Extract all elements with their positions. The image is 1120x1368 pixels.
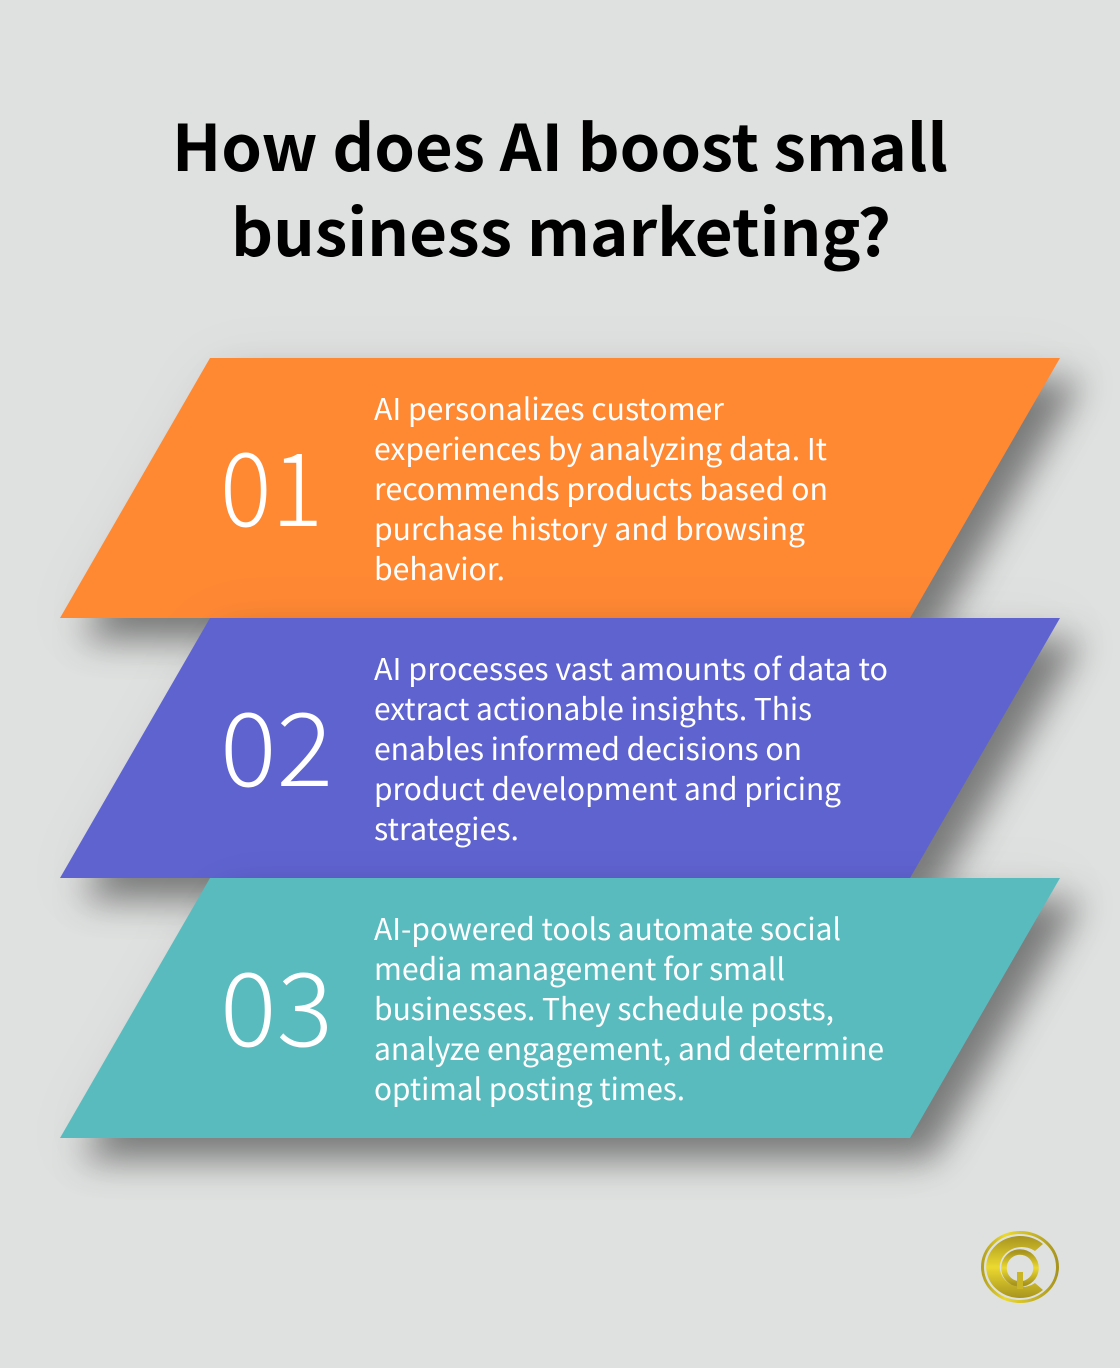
text: step 03: analyze engagement, and determine xyxy=(374,1025,884,1069)
panel: step 03 xyxy=(60,878,1082,1160)
text: step 03: businesses. They schedule posts, xyxy=(374,985,834,1029)
number 01: 01 xyxy=(220,409,323,556)
text: step 01: recommends products based on xyxy=(374,465,828,509)
panel: step 01 xyxy=(60,358,1082,640)
text: step 02 xyxy=(374,645,888,849)
text: step 03: AI-powered tools automate social xyxy=(374,905,841,949)
text: step 01: AI personalizes customer xyxy=(374,385,724,429)
text: step 03: optimal posting times. xyxy=(374,1065,685,1109)
text: step 02: product development and pricing xyxy=(374,765,841,809)
text: step 01 xyxy=(374,385,828,589)
number 02: 02 xyxy=(220,669,333,816)
text: step 01: experiences by analyzing data. It xyxy=(374,425,827,469)
text: step 02: AI processes vast amounts of data to xyxy=(374,645,888,689)
text: step 01: purchase history and browsing xyxy=(374,505,805,549)
number 03: 03 xyxy=(220,929,333,1076)
title: business marketing? xyxy=(231,183,891,275)
text: step 02: extract actionable insights. This xyxy=(374,685,812,729)
text: step 02: enables informed decisions on xyxy=(374,725,802,769)
title xyxy=(172,98,948,275)
text: step 03: media management for small xyxy=(374,945,785,989)
panel: step 02 xyxy=(60,618,1082,900)
text: step 02: strategies. xyxy=(374,805,519,849)
text: step 03 xyxy=(374,905,884,1109)
title: How does AI boost small xyxy=(172,98,948,190)
text: step 01: behavior. xyxy=(374,545,505,589)
icon: gold logo xyxy=(982,1232,1058,1302)
